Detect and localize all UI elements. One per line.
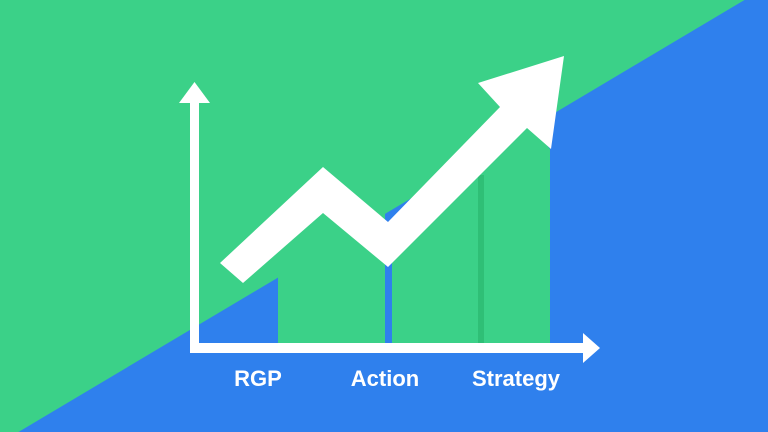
bar: Action [392, 150, 478, 346]
axes [179, 82, 600, 363]
bar: RGP [278, 200, 385, 346]
label: RGP: RGP [234, 366, 282, 391]
bar chart [278, 120, 550, 346]
arrow: trend [220, 56, 564, 283]
label: Strategy: Strategy [472, 366, 561, 391]
bar: Strategy [478, 120, 550, 346]
label: Action: Action [351, 366, 419, 391]
labels [234, 366, 561, 391]
